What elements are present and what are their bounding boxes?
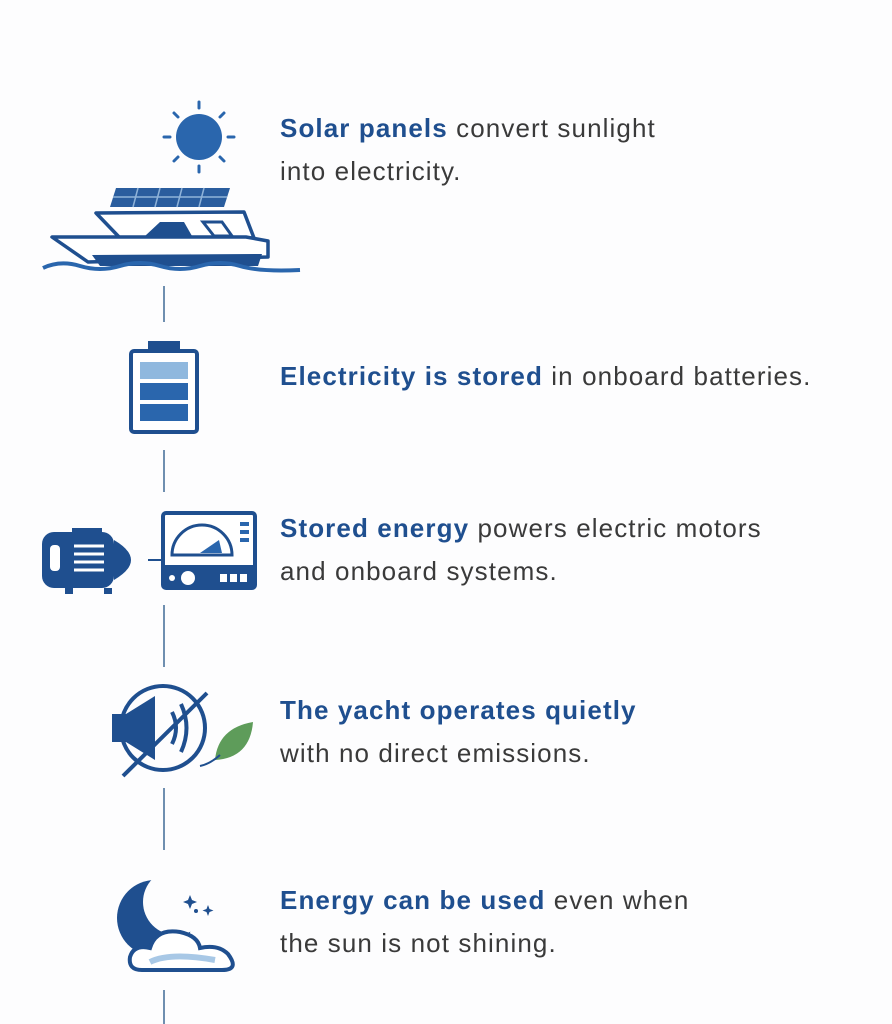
text: quiet [280, 695, 637, 768]
text: solar panels: into electricity. [280, 156, 462, 186]
text: quiet: The yacht operates quietly [280, 695, 637, 725]
icon: moon, stars, cloud [117, 880, 233, 970]
icon: sun [164, 102, 234, 172]
text: night use: Energy can be used even when [280, 885, 689, 915]
icon: silent with leaf [112, 686, 253, 776]
icon: battery [131, 341, 197, 432]
text: motors: and onboard systems. [280, 556, 558, 586]
icon: sun and solar yacht [42, 100, 300, 972]
text: night use: the sun is not shining. [280, 928, 557, 958]
text: storage: Electricity is stored in onboard batteries. [280, 361, 811, 391]
text: motors: Stored energy powers electric motors [280, 513, 762, 543]
text: quiet: with no direct emissions. [280, 738, 591, 768]
icon: yacht [43, 188, 300, 270]
text: motors [280, 513, 762, 586]
text: solar panels [280, 113, 656, 186]
text: night use [280, 885, 689, 958]
text: solar panels: Solar panels convert sunlight [280, 113, 656, 143]
icon: motor and control panel [42, 513, 255, 594]
